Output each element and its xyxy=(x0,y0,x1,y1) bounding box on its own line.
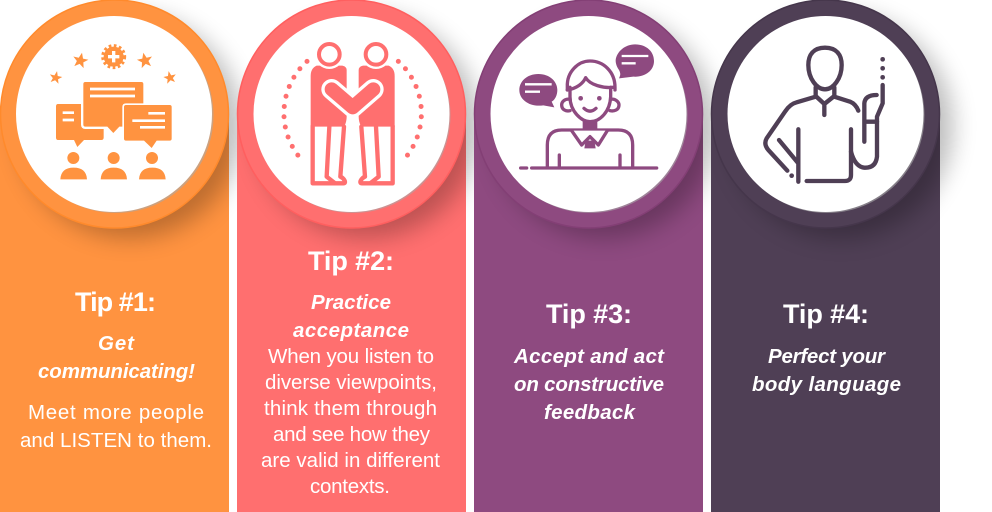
text: tip 4: Tip #4: xyxy=(783,299,869,329)
text: tip 1: communicating! xyxy=(38,360,195,383)
icon: person speaking with speech bubbles xyxy=(519,44,657,168)
icon: group discussion xyxy=(48,46,177,179)
panel bar xyxy=(711,115,940,512)
text: tip 2: Practice xyxy=(311,291,391,314)
outer ring xyxy=(712,0,940,228)
text: tip 4: body language xyxy=(752,373,901,396)
text: tip 4: Perfect your xyxy=(768,345,886,368)
text: tip 2: diverse viewpoints, xyxy=(265,371,437,394)
panel: tip 1 xyxy=(0,0,242,512)
text: tip 2: and see how they xyxy=(273,423,431,446)
text: tip 2: think them through xyxy=(264,397,437,420)
circle shadow xyxy=(18,14,242,238)
panel bar xyxy=(237,115,466,512)
circle shadow xyxy=(492,14,716,238)
text: tip 1: Meet more people xyxy=(28,401,204,424)
panel: tip 3 xyxy=(474,0,716,512)
white disc xyxy=(728,16,924,213)
icon: person raising hand xyxy=(765,48,885,182)
text: tip 4 xyxy=(752,299,901,396)
text: tip 2: Tip #2: xyxy=(308,246,394,276)
panel bar xyxy=(474,115,703,512)
white disc xyxy=(16,16,214,213)
text: tip 3: on constructive xyxy=(514,373,664,396)
outer ring xyxy=(238,0,466,228)
text: tip 3: Accept and act xyxy=(513,345,665,368)
text: tip 1 xyxy=(20,287,212,452)
text: tip 3 xyxy=(513,299,665,424)
text: tip 2: are valid in different xyxy=(261,449,440,472)
panel bar xyxy=(0,115,229,512)
white disc xyxy=(254,16,450,213)
text: tip 1: Get xyxy=(98,332,135,355)
text: tip 2: When you listen to xyxy=(268,345,434,368)
circle shadow xyxy=(255,14,479,238)
text: tip 2: acceptance xyxy=(293,319,409,342)
text: tip 1: and LISTEN to them. xyxy=(20,429,212,452)
outer ring xyxy=(474,0,702,228)
text: tip 1: Tip #1: xyxy=(75,287,156,317)
text: tip 3: feedback xyxy=(544,401,637,424)
white disc xyxy=(490,16,688,213)
panel: tip 4 xyxy=(711,0,953,512)
text: tip 2 xyxy=(261,246,440,498)
outer ring xyxy=(0,0,228,228)
panel: tip 2 xyxy=(237,0,479,512)
icon: two people holding hands xyxy=(284,40,421,183)
circle shadow xyxy=(729,14,953,238)
text: tip 2: contexts. xyxy=(310,475,390,498)
text: tip 3: Tip #3: xyxy=(546,299,632,329)
